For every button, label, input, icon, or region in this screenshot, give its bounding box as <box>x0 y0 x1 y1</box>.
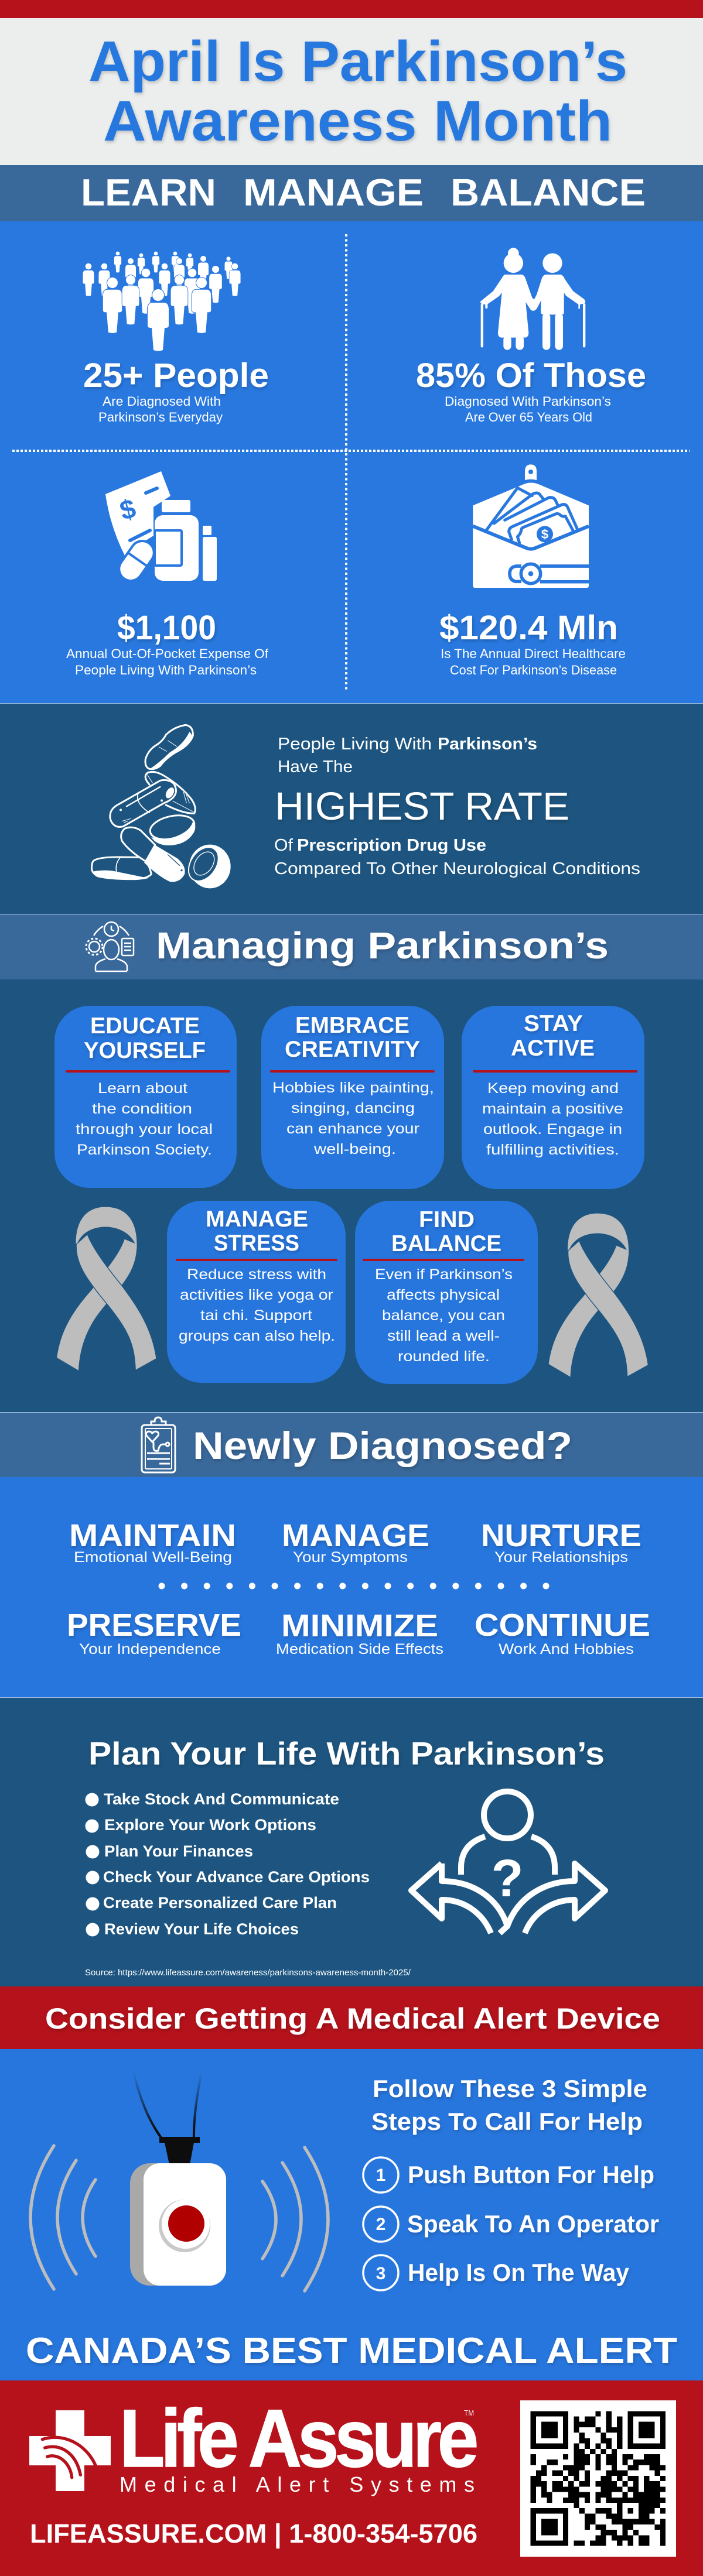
stat: $1,100: People Living With Parkinson’s <box>75 663 257 677</box>
card: embrace creativity: singing, dancing <box>291 1100 415 1116</box>
item: nurture: Your Relationships <box>494 1549 628 1566</box>
item: minimize <box>276 1608 443 1657</box>
heading: Newly Diagnosed? <box>193 1424 572 1467</box>
heading words: MANAGE <box>243 171 424 214</box>
text block: highest rate: HIGHEST RATE <box>275 785 569 828</box>
bullet list <box>86 1790 370 1938</box>
card: find balance: balance, you can <box>382 1307 505 1324</box>
icon: prescription and medicine bottles: $ <box>117 493 139 526</box>
item: nurture: NURTURE <box>481 1518 641 1553</box>
heading: Consider Getting A Medical Alert Device <box>45 2002 660 2035</box>
bullet list: Review Your Life Choices <box>104 1920 299 1938</box>
icon: person at crossroads <box>411 1791 605 1933</box>
panel: highest rate of prescription drug use <box>0 703 703 914</box>
text block: highest rate: Prescription Drug Use <box>297 836 486 855</box>
item: minimize: Medication Side Effects <box>276 1641 443 1657</box>
text block: highest rate: Have The <box>278 758 353 776</box>
step 1 <box>363 2157 654 2193</box>
step 3: Help Is On The Way <box>408 2259 630 2286</box>
item: minimize: MINIMIZE <box>281 1608 438 1643</box>
text block: highest rate <box>274 735 640 878</box>
heading words: LEARN <box>81 171 216 214</box>
card: embrace creativity: well-being. <box>313 1141 396 1157</box>
item: continue: Work And Hobbies <box>499 1641 634 1657</box>
step 3 <box>363 2255 630 2290</box>
panel: plan your life <box>0 1697 703 1987</box>
card: educate yourself: EDUCATE <box>90 1013 200 1039</box>
heading: steps: Follow These 3 Simple <box>373 2075 647 2102</box>
card: manage stress: groups can also help. <box>179 1328 335 1344</box>
item: manage: MANAGE <box>282 1518 429 1553</box>
heading: canada's best: CANADA’S BEST MEDICAL ALERT <box>26 2331 677 2371</box>
heading words: BALANCE <box>451 171 646 214</box>
card: educate yourself: Learn about <box>98 1080 187 1097</box>
icon: left awareness ribbon <box>57 1207 156 1371</box>
card: manage stress: activities like yoga or <box>180 1287 333 1303</box>
step 1: 1 <box>376 2166 385 2185</box>
panel: footer <box>0 2380 703 2576</box>
card: embrace creativity: can enhance your <box>286 1121 419 1137</box>
item: maintain: Emotional Well-Being <box>74 1549 232 1566</box>
stat: 25+ people: Are Diagnosed With <box>103 394 221 409</box>
step 3: 3 <box>376 2264 385 2283</box>
text block: highest rate: Of <box>274 836 294 855</box>
stat: $120.4 Mln <box>439 609 626 677</box>
panel: title <box>0 18 703 165</box>
stat: 25+ people: 25+ People <box>83 357 269 395</box>
card: find balance: affects physical <box>387 1287 500 1303</box>
card: stay active: fulfilling activities. <box>486 1142 619 1158</box>
card: educate yourself <box>54 1006 237 1188</box>
icon: crowd of people <box>83 252 241 351</box>
stat: $120.4 Mln: $120.4 Mln <box>439 609 618 647</box>
card: manage stress: STRESS <box>214 1231 299 1256</box>
text block: highest rate: People Living With <box>278 735 432 753</box>
item: maintain: MAINTAIN <box>69 1518 236 1553</box>
bullet list: Check Your Advance Care Options <box>103 1868 370 1886</box>
panel: medical alert device <box>0 2049 703 2380</box>
card: embrace creativity <box>261 1006 444 1189</box>
card: educate yourself: the condition <box>92 1101 192 1117</box>
stat: 85% <box>416 357 646 424</box>
step 2: Speak To An Operator <box>407 2210 659 2238</box>
icon: prescription and medicine bottles <box>105 471 217 585</box>
stat: $120.4 Mln: Is The Annual Direct Healthcare <box>441 646 626 661</box>
card: embrace creativity: EMBRACE <box>295 1013 409 1038</box>
card: manage stress: tai chi. Support <box>200 1307 312 1324</box>
source: Source: https://www.lifeassure.com/awareness/parkinsons-awareness-month-2025/ <box>85 1968 411 1978</box>
step 1: Push Button For Help <box>408 2161 654 2188</box>
card: manage stress: Reduce stress with <box>187 1266 326 1283</box>
QR code <box>520 2400 676 2557</box>
panel: medical alert banner <box>0 1986 703 2049</box>
title: Awareness Month <box>103 89 612 153</box>
logo: life assure: TM <box>464 2409 474 2417</box>
card: educate yourself: through your local <box>76 1121 213 1138</box>
stat: 85%: 85% Of Those <box>416 357 646 395</box>
panel: managing parkinson's tips <box>0 979 703 1412</box>
heading: Managing Parkinson’s <box>156 924 609 967</box>
stat: 85%: Diagnosed With Parkinson’s <box>445 394 611 409</box>
step 2: 2 <box>376 2215 385 2234</box>
card: find balance <box>355 1201 538 1384</box>
text block: highest rate: Compared To Other Neurological Conditions <box>274 859 640 878</box>
item: continue <box>475 1608 650 1657</box>
card: manage stress <box>167 1201 346 1383</box>
step 2 <box>363 2207 659 2242</box>
stat: $1,100 <box>66 609 269 677</box>
card: find balance: still lead a well- <box>387 1328 500 1344</box>
dotted divider <box>158 1583 550 1589</box>
panel: statistics <box>0 221 703 703</box>
bullet list: Take Stock And Communicate <box>104 1790 339 1808</box>
item: preserve <box>67 1608 241 1657</box>
panel: learn manage balance band <box>0 165 703 221</box>
item: maintain <box>69 1518 236 1566</box>
icon: pile of pills <box>91 725 231 888</box>
heading: steps: Steps To Call For Help <box>371 2108 643 2135</box>
title: April Is Parkinson’s <box>88 29 627 93</box>
card: educate yourself: YOURSELF <box>84 1038 206 1063</box>
heading words <box>81 171 646 214</box>
bullet list: Create Personalized Care Plan <box>103 1894 337 1912</box>
title <box>88 29 627 153</box>
card: stay active <box>462 1006 644 1189</box>
stat: 85%: Are Over 65 Years Old <box>465 410 592 424</box>
item: preserve: Your Independence <box>79 1641 221 1657</box>
card: stay active: outlook. Engage in <box>483 1121 622 1138</box>
card: stay active: Keep moving and <box>487 1080 619 1097</box>
contact line: LIFEASSURE.COM | 1-800-354-5706 <box>30 2519 477 2549</box>
icon: envelope with cash: $ <box>541 527 548 542</box>
item: manage: Your Symptoms <box>293 1549 408 1566</box>
item: continue: CONTINUE <box>475 1608 650 1643</box>
stat: 25+ people <box>83 357 269 424</box>
logo: life assure: Medical Alert Systems <box>120 2472 475 2496</box>
panel: newly diagnosed actions <box>0 1477 703 1697</box>
heading: Plan Your Life With Parkinson’s <box>88 1735 605 1772</box>
icon: elderly couple <box>480 248 585 350</box>
item: preserve: PRESERVE <box>67 1608 241 1643</box>
icon: right awareness ribbon <box>549 1214 649 1377</box>
card: manage stress: MANAGE <box>206 1207 308 1232</box>
card: stay active: ACTIVE <box>511 1036 595 1061</box>
bullet list: Plan Your Finances <box>104 1842 253 1860</box>
card: educate yourself: Parkinson Society. <box>77 1142 212 1158</box>
logo: life assure <box>29 2392 477 2496</box>
top red stripe <box>0 0 703 18</box>
card: embrace creativity: CREATIVITY <box>285 1037 420 1062</box>
card: stay active: maintain a positive <box>482 1101 623 1117</box>
card: stay active: STAY <box>524 1011 583 1036</box>
card: embrace creativity: Hobbies like painting, <box>272 1080 434 1096</box>
card: find balance: FIND <box>419 1207 475 1232</box>
bullet list: Explore Your Work Options <box>104 1816 316 1834</box>
icon: person with clock, gear and clipboard <box>86 922 134 971</box>
logo: life assure: Life Assure <box>120 2392 477 2484</box>
icon: person at crossroads: ? <box>492 1849 523 1908</box>
icon: pendant alarm with signal waves <box>30 2071 328 2291</box>
icon: clipboard with stethoscope <box>142 1417 175 1472</box>
stat: $120.4 Mln: Cost For Parkinson’s Disease <box>450 663 617 677</box>
heading: steps <box>371 2075 647 2135</box>
stat: 25+ people: Parkinson’s Everyday <box>98 410 223 424</box>
stat: $1,100: $1,100 <box>117 609 216 647</box>
stat: $1,100: Annual Out-Of-Pocket Expense Of <box>66 646 269 661</box>
card: find balance: Even if Parkinson’s <box>375 1266 513 1283</box>
panel: managing parkinson's header <box>0 914 703 979</box>
icon: envelope with cash <box>473 464 589 588</box>
card: find balance: BALANCE <box>391 1231 501 1256</box>
panel: newly diagnosed header <box>0 1412 703 1477</box>
text block: highest rate: Parkinson’s <box>438 735 537 753</box>
card: find balance: rounded life. <box>398 1348 490 1365</box>
